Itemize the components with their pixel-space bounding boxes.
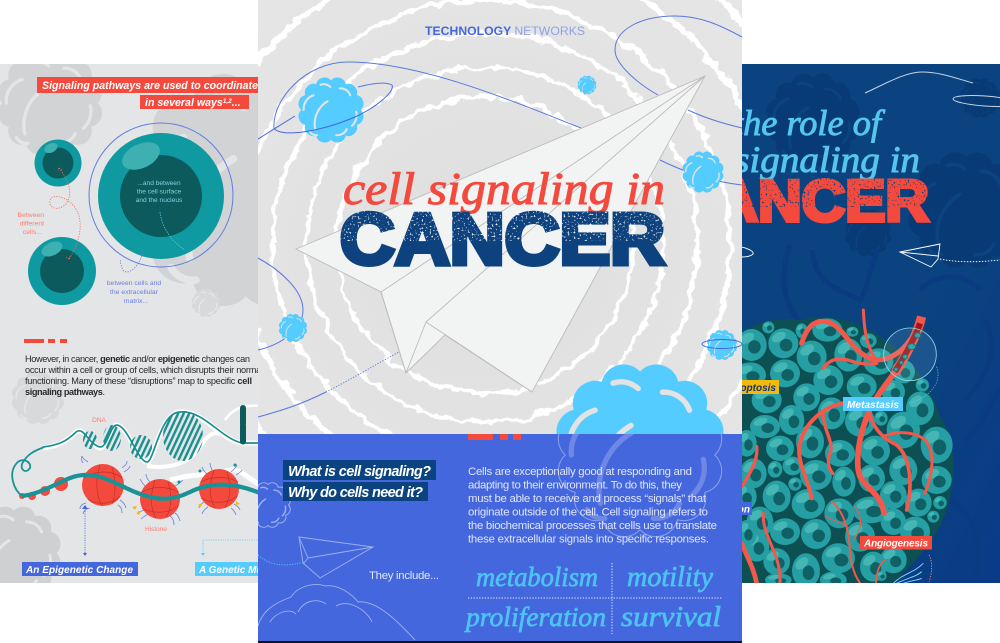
dotted arrow: magnifier (908, 367, 938, 403)
text block: cancer disruptions: functioning. Many of these “disruptions” map to specific cell (25, 376, 252, 386)
dotted arrow: nucleus to surface (160, 212, 185, 250)
heading: what is cell signaling: Why do cells need it? (288, 485, 423, 501)
text block: cancer disruptions: occur within a cell or group of cells, which disrupts their normal (25, 365, 263, 375)
curve: signal path, right (615, 16, 742, 185)
text block: definition: these extracellular signals into specific responses. (468, 534, 709, 546)
heading: signaling pathways: Signaling pathways are used to coordinate (42, 80, 258, 92)
grid: processes: metabolism (476, 562, 598, 592)
panel: central page, cover (145, 0, 825, 585)
label: apoptosis (742, 380, 779, 394)
cell: large with membrane ring: and the nucleus (136, 197, 183, 204)
heading: signaling pathways: in several ways (145, 97, 223, 109)
title: the role of cell signaling in (742, 109, 919, 180)
label: between different cells: different (20, 220, 44, 228)
blood vessels (742, 310, 932, 585)
label: between different cells: cells... (23, 229, 42, 236)
dotted arrow: angiogenesis (929, 555, 932, 582)
heading: what is cell signaling (283, 460, 436, 501)
text block: definition: originate outside of the cell. Cell signaling refers to (468, 506, 708, 518)
icon: outline paper plane (258, 537, 373, 578)
text block: definition: adapting to their environment. To do this, they (468, 480, 682, 492)
title: CANCER: CANCER (340, 200, 665, 280)
icon: paper plane (296, 76, 705, 392)
label: metastasis: Metastasis (847, 400, 899, 411)
wisps (893, 563, 923, 583)
clouds: blue signal clouds (279, 76, 737, 360)
label: apoptosis: Apoptosis (726, 383, 776, 394)
background vessels (782, 244, 974, 320)
background clouds (0, 64, 258, 583)
grid: processes (464, 562, 722, 634)
heading: signaling pathways: ... (232, 97, 241, 109)
dotted arrow: extracellular matrix (120, 251, 143, 272)
grid: processes: motility (627, 562, 714, 593)
label: extracellular matrix: the extracellular (110, 289, 159, 296)
label: an epigenetic change: An Epigenetic Change (25, 565, 133, 576)
logo: Technology Networks: TECHNOLOGYNETWORKS (425, 24, 585, 38)
divider dashes (24, 339, 67, 343)
magnifier circle (884, 328, 936, 381)
icon: paper plane (742, 244, 1000, 267)
label: extracellular matrix: between cells and (107, 280, 161, 287)
arrow: to genetic mutation (201, 540, 260, 556)
background clouds (767, 74, 1000, 268)
diagram: DNA strand (43, 406, 262, 467)
label: metastasis (843, 397, 903, 411)
cell: large with membrane ring (89, 123, 233, 267)
curve: signal path with orbit, left (258, 62, 581, 417)
label: a genetic mutation: A Genetic Mutation (198, 565, 290, 576)
orbit: front of left cloud (258, 85, 392, 139)
diagram: tumour cell mass (733, 310, 953, 588)
arrow: to epigenetic change (82, 505, 88, 556)
heading: what is cell signaling: What is cell signaling? (288, 464, 431, 480)
label: angiogenesis: Angiogenesis (863, 538, 928, 550)
cover background (258, 0, 742, 434)
panel: right page, the role of cell signaling in cancer (742, 64, 1000, 583)
grid: processes: survival (621, 602, 721, 633)
label: a genetic mutation (195, 562, 258, 576)
title: CANCER: CANCER (671, 169, 929, 234)
panel: left page, coordination of signaling (0, 64, 258, 583)
text: they include: They include... (369, 570, 439, 582)
diagram: histones and chromatin (12, 447, 262, 525)
signal wave rings (145, 0, 825, 585)
panel: what is cell signaling (246, 373, 742, 643)
label: invasion (742, 502, 752, 515)
title: the role of cell signaling in: the role of (733, 103, 886, 143)
vessel cross-section with circulating cells (894, 317, 922, 373)
cloud: large foreground (556, 364, 724, 532)
orbit: small right cloud (702, 340, 742, 348)
bottom edge (258, 641, 742, 643)
label: extracellular matrix: matrix... (124, 298, 148, 305)
background cloud outlines (246, 373, 722, 640)
label: Histone: Histone (145, 526, 167, 533)
label: DNA: DNA (92, 417, 107, 424)
heading: signaling pathways (37, 77, 261, 109)
dotted arrow: between different cells (50, 168, 80, 259)
text block: definition: the biochemical processes that cells use to translate (468, 520, 717, 532)
curve: white signal line (865, 72, 1000, 108)
title: cell signaling in: cell signaling in (343, 163, 665, 214)
cell: large with membrane ring: the cell surface (137, 188, 182, 196)
text block: cancer disruptions: signaling pathways. (25, 387, 105, 397)
cell: large with membrane ring: ...and between (137, 180, 181, 187)
heading: signaling pathways: 1,2 (223, 98, 232, 105)
label: invasion: Invasion (709, 504, 750, 516)
label: between different cells: Between (18, 212, 44, 219)
text block: definition: must be able to receive and process “signals” that (468, 493, 707, 505)
cell: small bottom (28, 237, 96, 305)
text block: cancer disruptions: However, in cancer, genetic and/or epigenetic changes can (25, 354, 250, 364)
divider dashes (468, 434, 521, 440)
text block: definition: Cells are exceptionally good at responding and (468, 466, 692, 478)
cell: small top (34, 140, 82, 186)
title: the role of cell signaling in: cell signaling in (668, 140, 920, 181)
grid: processes: proliferation (464, 602, 606, 632)
icon: chromosome (240, 408, 246, 442)
